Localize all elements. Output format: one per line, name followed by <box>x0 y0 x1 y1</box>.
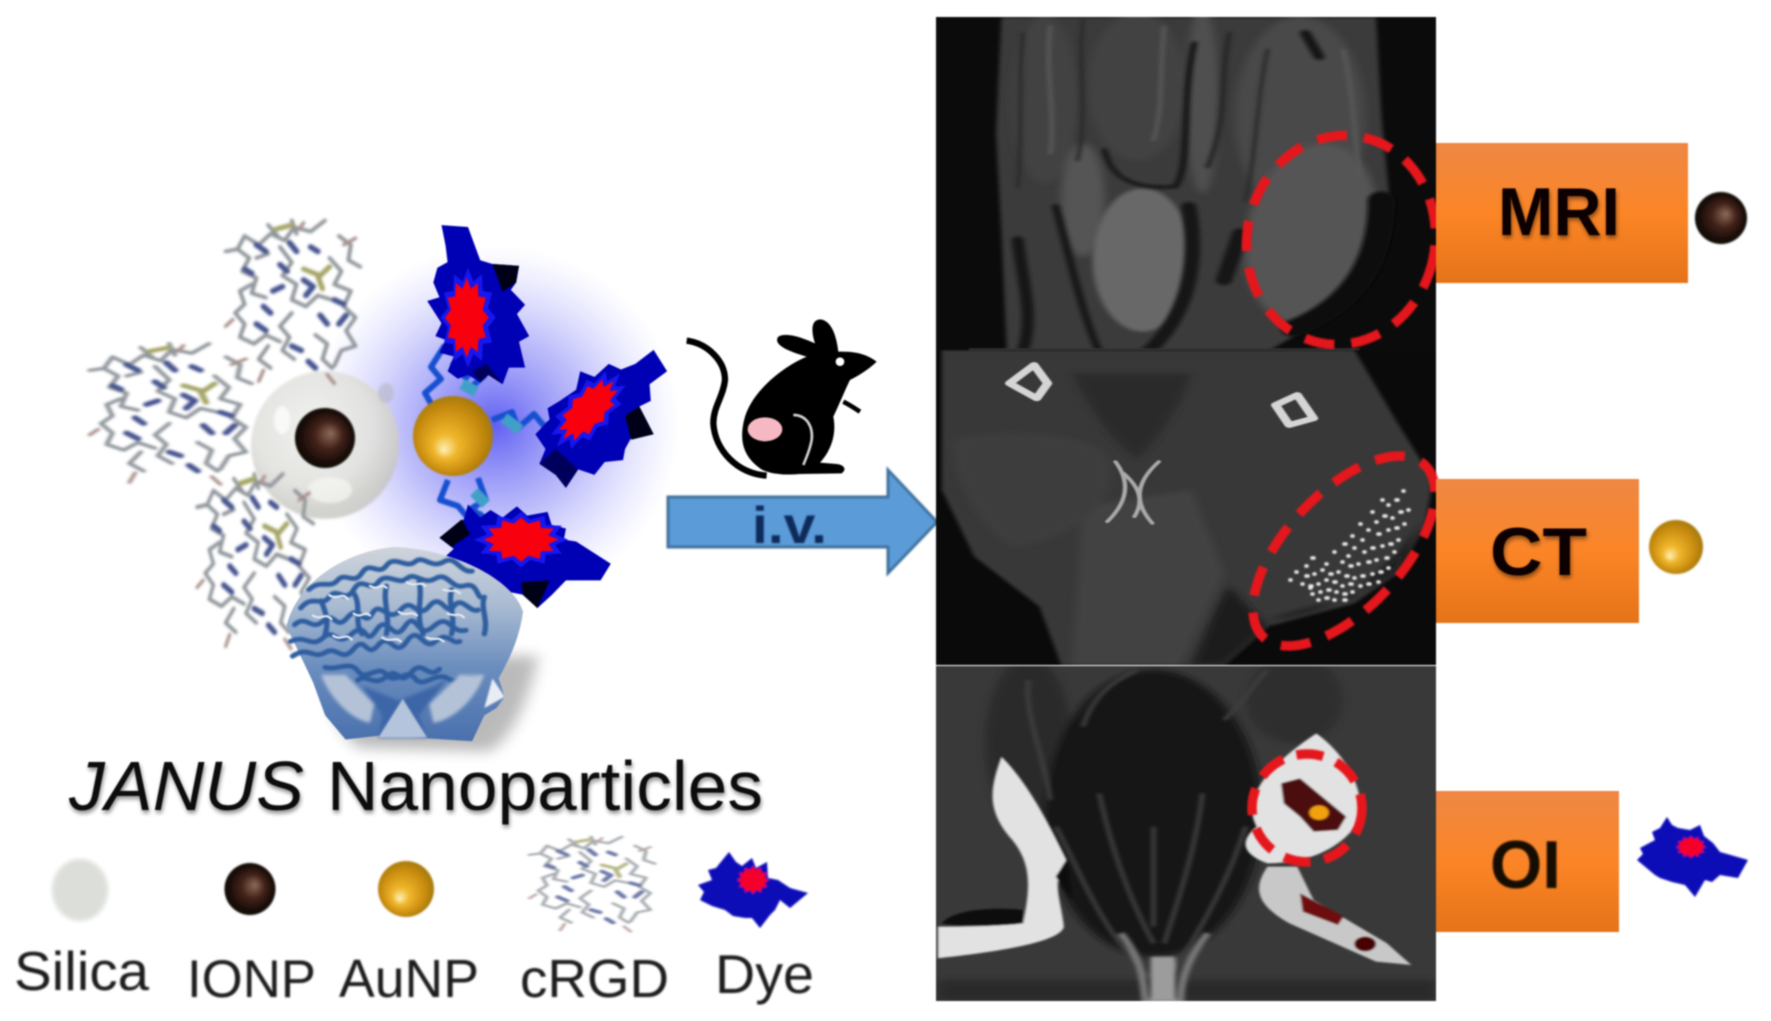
MRI tumour outline <box>1227 118 1455 362</box>
legend: IONP: IONP <box>187 950 316 1009</box>
arrow: i.v. injection <box>668 470 937 573</box>
label: CT: CT <box>1490 514 1587 590</box>
cRGD molecule bottom <box>197 474 313 649</box>
silica sphere <box>251 371 399 519</box>
icon: AuNP for CT <box>1649 520 1703 574</box>
label: MRI <box>1436 143 1688 283</box>
label: OI <box>1436 791 1619 932</box>
cRGD molecule top <box>226 221 360 383</box>
icon: IONP for MRI <box>1695 192 1747 244</box>
legend: IONP <box>187 863 316 1009</box>
icon: dye for OI <box>1637 817 1748 897</box>
OI tumour outline <box>1252 754 1362 862</box>
legend: dye: Dye <box>715 943 814 1005</box>
panel: optical imaging <box>936 657 1436 1001</box>
legend: dye <box>698 852 814 1005</box>
legend: AuNP <box>339 861 479 1009</box>
cRGD molecule left <box>90 344 252 484</box>
dye bottom <box>439 504 611 608</box>
gold nanoparticle <box>413 396 493 476</box>
CT speckle <box>1290 491 1409 600</box>
panel: CT scan <box>936 350 1436 666</box>
iron oxide nanoparticle <box>295 408 355 468</box>
legend: silica: Silica <box>14 940 149 1002</box>
CT tumour outline <box>1221 425 1467 677</box>
legend <box>14 837 814 1009</box>
linkers <box>425 345 558 528</box>
label: CT <box>1436 479 1639 623</box>
panel: MRI scan <box>936 7 1436 353</box>
title <box>68 747 763 825</box>
janus nanoparticle illustration <box>90 221 680 752</box>
label: OI: OI <box>1490 827 1561 903</box>
janus two-faced head <box>286 547 538 752</box>
dye top <box>427 225 529 384</box>
blue fluorescence glow <box>310 245 680 605</box>
title: Nanoparticles <box>327 747 763 825</box>
legend: AuNP: AuNP <box>339 949 479 1009</box>
legend: silica <box>14 859 149 1002</box>
arrow: i.v. injection: i.v. <box>752 497 827 555</box>
legend: cRGD <box>520 837 669 1009</box>
label: MRI: MRI <box>1498 174 1620 250</box>
legend: cRGD: cRGD <box>520 949 669 1009</box>
icon: mouse <box>687 319 877 476</box>
title: JANUS <box>68 747 304 825</box>
dye right <box>535 350 667 488</box>
